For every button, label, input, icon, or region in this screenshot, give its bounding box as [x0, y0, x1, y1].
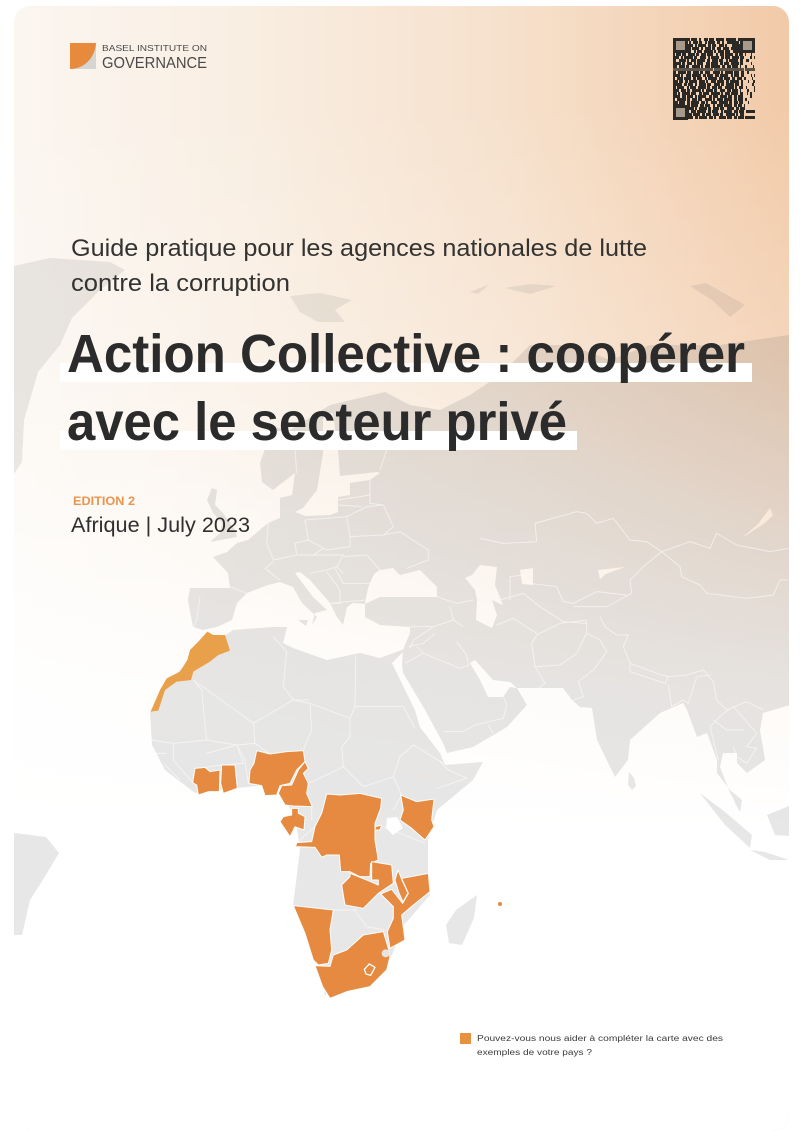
title: [60, 324, 752, 452]
map: Sicily: [298, 620, 308, 626]
country: Cameroon: [278, 762, 312, 807]
country: Gabon: [280, 808, 305, 837]
map: Madagascar: [446, 895, 477, 945]
legend text: Pouvez-vous nous aider à compléter la carte avec des: [477, 1034, 723, 1043]
map: borders of the Middle East: [405, 633, 507, 788]
title text: [67, 324, 745, 452]
country: Ghana: [221, 765, 237, 793]
legend: [460, 1033, 723, 1057]
map: highlighted African countries: [151, 632, 434, 998]
map: Eurasia: [188, 335, 800, 810]
country: Mozambique: [381, 873, 430, 948]
country: South Africa: [315, 932, 390, 998]
country: Ivory Coast: [193, 767, 220, 795]
logo: Basel Institute on Governance: [70, 43, 207, 72]
map: UK: [207, 488, 237, 542]
logo text: BASEL INSTITUTE ON: [102, 43, 207, 53]
map: borders of Africa: [152, 637, 443, 930]
map: Sumatra, Java, Borneo, Sri Lanka: [628, 772, 789, 860]
country: Burundi: [375, 825, 382, 830]
title highlight bars: [60, 363, 752, 450]
country: Morocco: [151, 632, 230, 712]
QR finder patterns: [674, 40, 754, 118]
country: Kenya: [400, 795, 434, 840]
subtitle: contre la corruption: [71, 270, 290, 297]
legend text: exemples de votre pays ?: [477, 1048, 593, 1057]
title text: Action Collective : coopérer: [67, 324, 745, 384]
title text: avec le secteur privé: [67, 392, 567, 452]
country: Malawi: [395, 870, 408, 902]
subtitle: Guide pratique pour les agences nationales de lutte: [71, 235, 647, 262]
country: Namibia: [293, 906, 333, 965]
region and date: Afrique | July 2023: [71, 514, 250, 537]
map: South America: [14, 833, 59, 935]
map: Greenland: [14, 258, 125, 474]
map: borders of Europe: [192, 450, 473, 648]
edition label: EDITION 2: [73, 496, 135, 508]
map: arctic islands: [290, 283, 745, 322]
logo mark: [70, 43, 96, 69]
map: land masses: [14, 258, 800, 995]
country: Eswatini: [382, 949, 390, 957]
country: Lesotho: [364, 964, 375, 975]
world map: [14, 258, 800, 998]
map: Africa land: [150, 627, 483, 995]
subtitle: [71, 235, 647, 297]
legend text: [477, 1034, 723, 1057]
logo text: GOVERNANCE: [102, 55, 207, 72]
legend swatch: [460, 1033, 471, 1044]
QR code: [673, 40, 755, 118]
country: Nigeria: [249, 751, 305, 796]
country: Zambia: [342, 862, 393, 908]
logo text: [102, 43, 207, 72]
country: DR Congo: [296, 793, 382, 877]
map: borders of Asia: [480, 512, 788, 763]
country: Mauritius: [498, 902, 502, 906]
